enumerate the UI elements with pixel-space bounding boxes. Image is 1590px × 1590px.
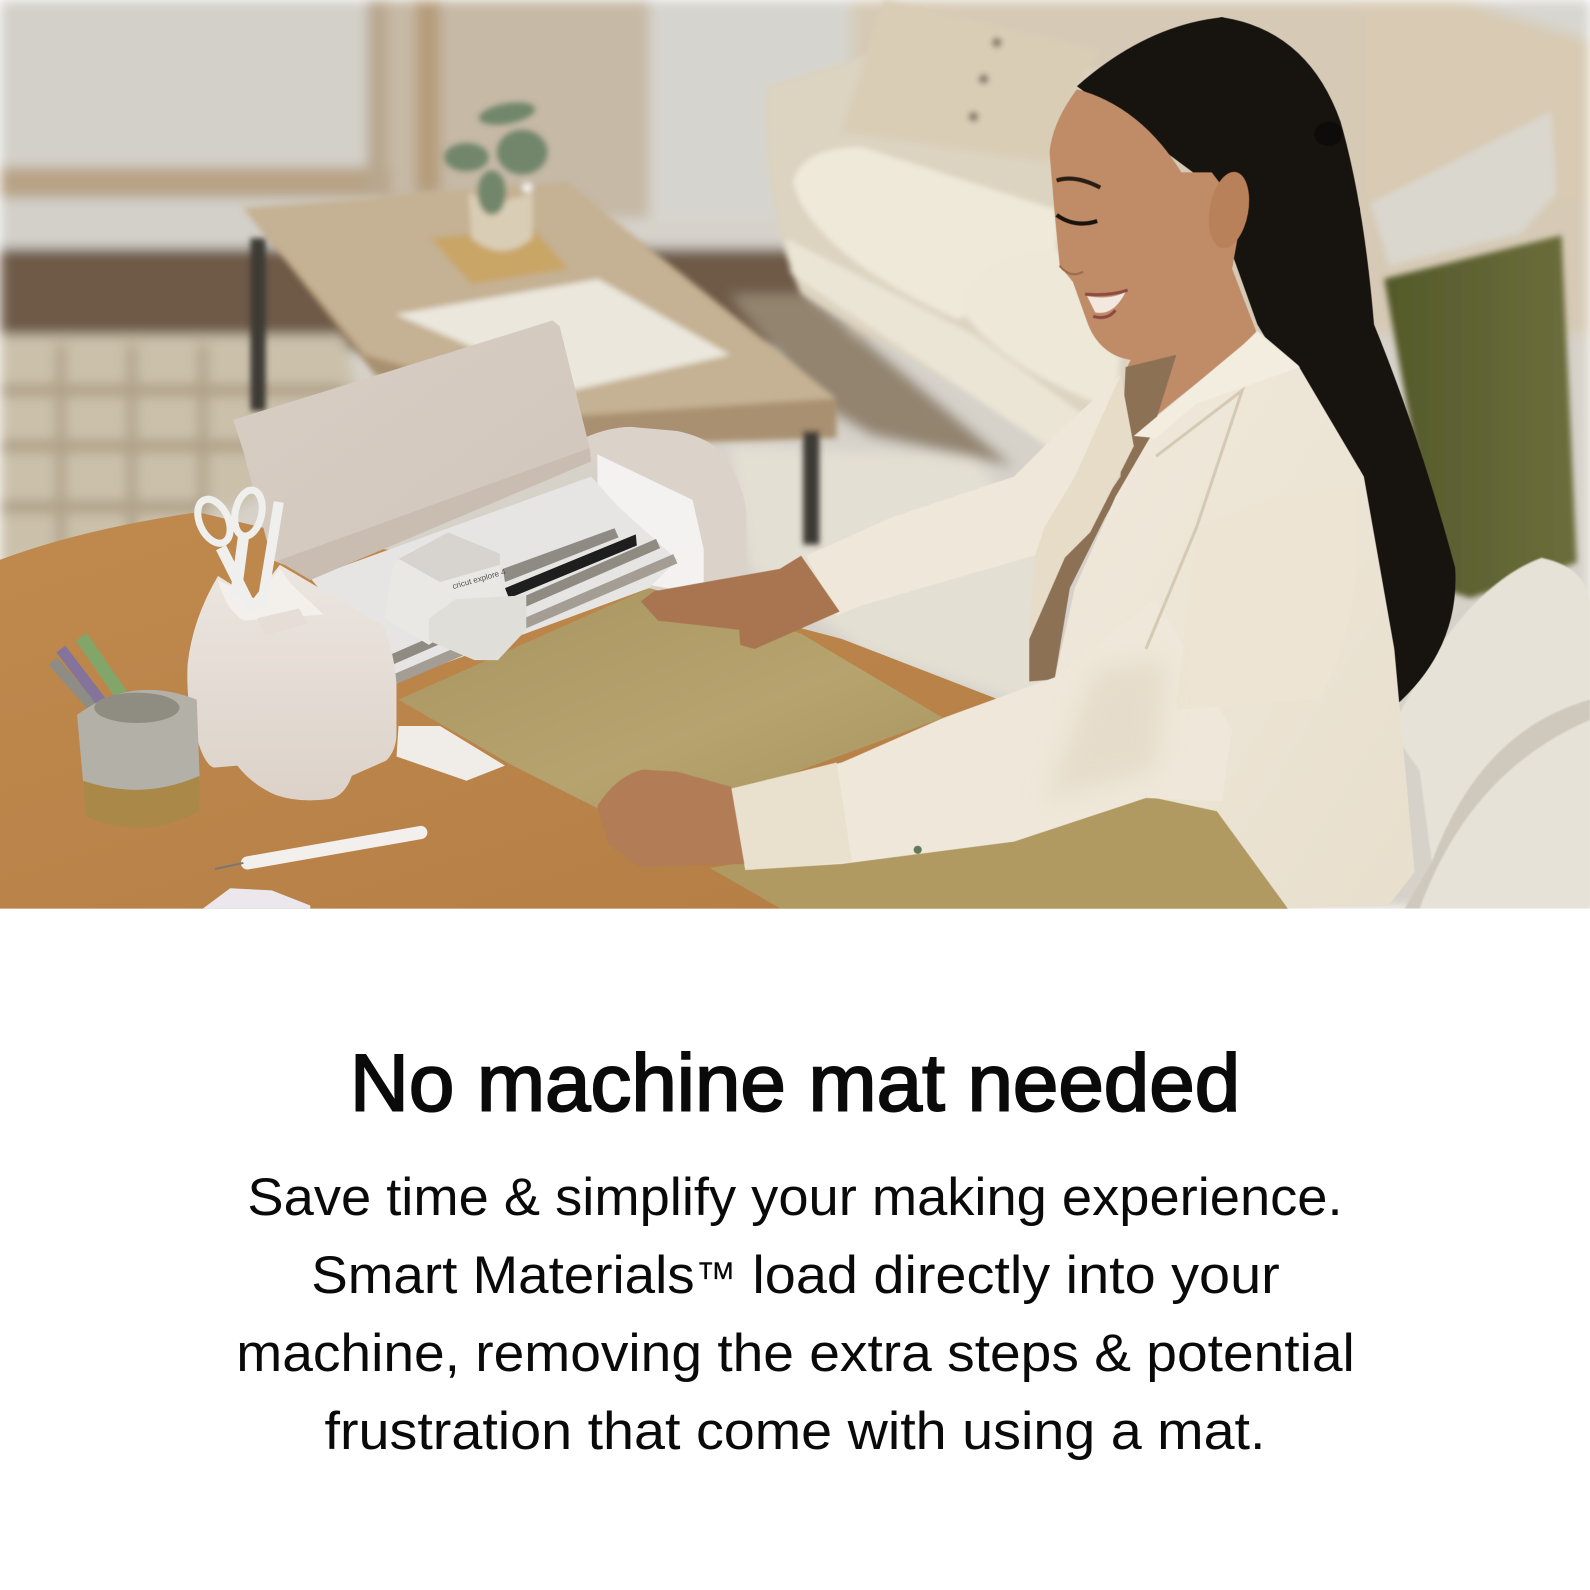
collar bbox=[1134, 333, 1300, 438]
heading: No machine mat needed bbox=[350, 1038, 1240, 1128]
hair back bbox=[1077, 17, 1455, 707]
weeding tool bbox=[215, 833, 421, 869]
brown undershirt bbox=[1029, 355, 1176, 681]
sleeve shadow bbox=[1056, 664, 1162, 792]
body text: ™ bbox=[696, 1254, 736, 1303]
scrunchie bbox=[1314, 122, 1343, 146]
cuff button bbox=[914, 846, 922, 854]
cutting machine: cricut explore 4 bbox=[451, 567, 507, 591]
coffee table with plant and booklet bbox=[243, 99, 837, 545]
chest pocket bbox=[1176, 487, 1359, 710]
woman's shirt bbox=[730, 331, 1415, 909]
lower cuff bbox=[730, 763, 852, 870]
machine left housing bbox=[187, 565, 396, 800]
body text: load directly into your bbox=[752, 1246, 1280, 1305]
front shirt panel bbox=[1029, 375, 1134, 639]
body text: frustration that come with using a mat. bbox=[324, 1402, 1266, 1461]
pencil cup with pens bbox=[53, 637, 200, 828]
sofa bbox=[766, 0, 1577, 598]
wooden desk bbox=[0, 512, 1288, 909]
machine carriage bbox=[422, 638, 432, 645]
photo: woman loading material into cutting machine bbox=[0, 0, 1590, 909]
upper hand on sheet bbox=[641, 556, 840, 649]
ear bbox=[1209, 172, 1250, 248]
facial features bbox=[1057, 179, 1128, 318]
machine lid bbox=[233, 320, 591, 573]
body text: machine, removing the extra steps & potential bbox=[236, 1324, 1355, 1383]
room background bbox=[0, 0, 1590, 909]
machine right housing bbox=[584, 427, 746, 598]
body text: Smart Materials bbox=[311, 1246, 695, 1305]
machine rails bbox=[503, 528, 619, 582]
face and neck bbox=[1050, 89, 1257, 436]
lower sleeve bbox=[730, 598, 1232, 870]
gold material sheet bbox=[399, 588, 1288, 909]
small white device bbox=[203, 888, 310, 909]
body text bbox=[236, 1168, 1355, 1461]
shirt torso bbox=[1055, 331, 1415, 909]
chair bbox=[1391, 558, 1590, 909]
body text: Save time & simplify your making experience. bbox=[247, 1168, 1343, 1227]
scissors and pen in caddy bbox=[191, 488, 279, 612]
lower hand on sheet bbox=[597, 770, 744, 867]
upper sleeve bbox=[806, 375, 1134, 616]
cutting machine bbox=[187, 320, 746, 800]
